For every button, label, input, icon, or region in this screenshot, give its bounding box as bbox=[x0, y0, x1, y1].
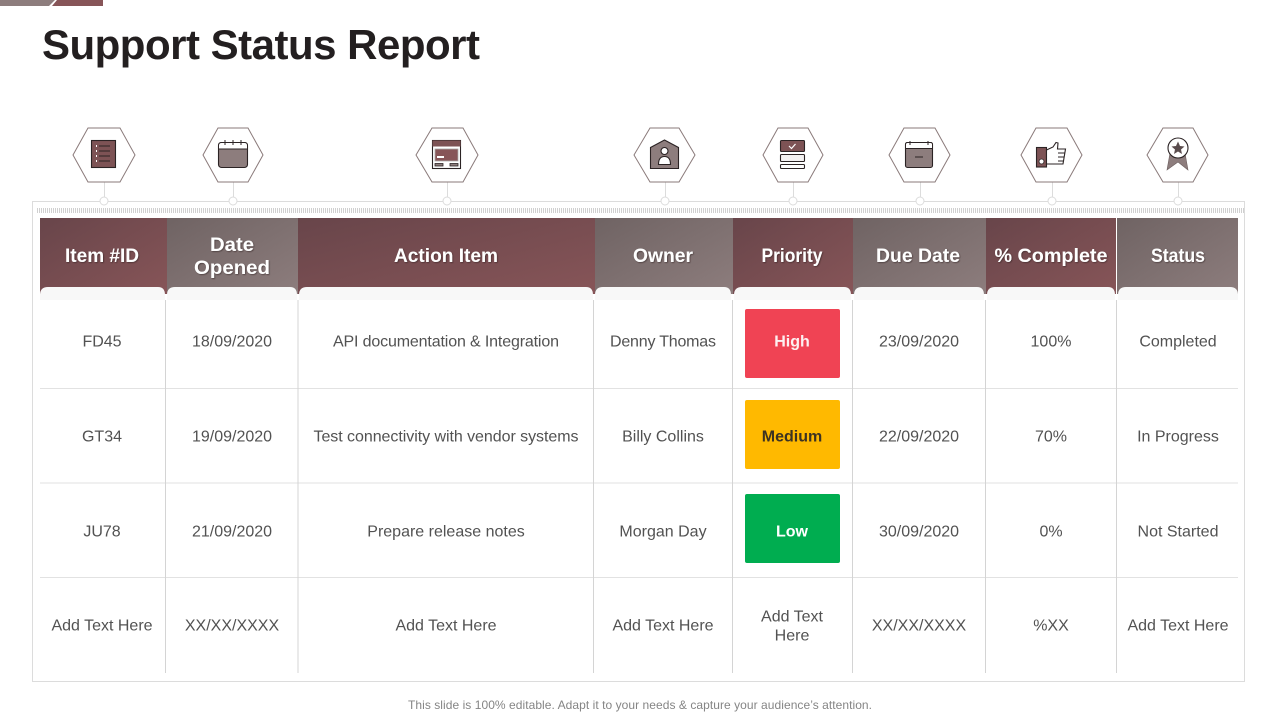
row 2: Test connectivity with vendor systems bbox=[314, 428, 578, 446]
priority badge: low: Low bbox=[776, 524, 809, 540]
table header row: Item #ID bbox=[65, 245, 139, 267]
title: Support Status Report bbox=[42, 21, 480, 68]
table header row bbox=[40, 218, 1238, 300]
row 4: Add Text Here bbox=[395, 618, 497, 634]
priority badge: high: High bbox=[774, 334, 810, 350]
priority badge: low bbox=[745, 494, 840, 563]
row 3: 21/09/2020 bbox=[192, 524, 272, 540]
row 2: GT34 bbox=[82, 428, 122, 446]
row 2: 19/09/2020 bbox=[192, 428, 272, 446]
table header row: Due Date bbox=[876, 245, 960, 267]
row 4: Add Text Here bbox=[1127, 618, 1229, 634]
row 2: Billy Collins bbox=[622, 428, 704, 446]
table header row: Owner bbox=[633, 245, 693, 267]
row 4: Add Text Here bbox=[51, 618, 153, 634]
icon column 6: due date calendar bbox=[889, 128, 950, 205]
table header row: Action Item bbox=[394, 245, 498, 267]
row 3: Not Started bbox=[1138, 524, 1218, 540]
row 2: In Progress bbox=[1137, 428, 1219, 446]
row 1: 100% bbox=[1031, 334, 1071, 350]
table header row: Opened bbox=[194, 257, 270, 279]
table header row: % Complete bbox=[994, 245, 1108, 267]
row 4: Add Text bbox=[761, 608, 824, 626]
row 3: Morgan Day bbox=[619, 524, 707, 540]
table frame bbox=[32, 202, 1244, 682]
icon column 5: priority stack bbox=[763, 128, 823, 205]
row 1 bbox=[82, 309, 1217, 378]
icon column 3: web page bbox=[416, 128, 478, 205]
row 3: JU78 bbox=[83, 524, 121, 540]
row 1: API documentation & Integration bbox=[333, 334, 559, 350]
row 3 bbox=[83, 494, 1218, 563]
table header row: Status bbox=[1151, 245, 1205, 267]
row 4 bbox=[51, 608, 1229, 644]
icon column 8: award ribbon bbox=[1147, 128, 1208, 205]
row 2 bbox=[82, 400, 1219, 469]
table grid lines bbox=[40, 300, 1238, 673]
row 3: Prepare release notes bbox=[367, 524, 525, 540]
icon column 7: thumbs up bbox=[1021, 128, 1082, 205]
row 1: Completed bbox=[1139, 334, 1217, 350]
icon column 1: item list bbox=[73, 128, 135, 205]
row 4: XX/XX/XXXX bbox=[872, 618, 966, 634]
row 3: 30/09/2020 bbox=[879, 524, 959, 540]
icon column 2: calendar bbox=[203, 128, 263, 205]
row 4: %XX bbox=[1033, 618, 1069, 634]
priority badge: medium: Medium bbox=[762, 428, 822, 446]
top corner accent bbox=[0, 0, 103, 6]
priority badge: medium bbox=[745, 400, 840, 469]
row 1: 23/09/2020 bbox=[879, 334, 959, 350]
row 1: 18/09/2020 bbox=[192, 334, 272, 350]
row 3: 0% bbox=[1039, 524, 1063, 540]
row 4: Add Text Here bbox=[612, 618, 714, 634]
row 1: Denny Thomas bbox=[610, 334, 716, 350]
row 2: 22/09/2020 bbox=[879, 428, 959, 446]
row 4: XX/XX/XXXX bbox=[185, 618, 279, 634]
row 1: FD45 bbox=[82, 334, 122, 350]
table header row: Priority bbox=[762, 245, 823, 267]
row 4: Here bbox=[775, 628, 809, 644]
priority badge: high bbox=[745, 309, 840, 378]
footer note: This slide is 100% editable. Adapt it to your needs & capture your audience’s attention. bbox=[408, 698, 872, 712]
row 2: 70% bbox=[1035, 428, 1067, 446]
icon column 4: person in house bbox=[634, 128, 695, 205]
table header row: Date bbox=[210, 234, 254, 256]
